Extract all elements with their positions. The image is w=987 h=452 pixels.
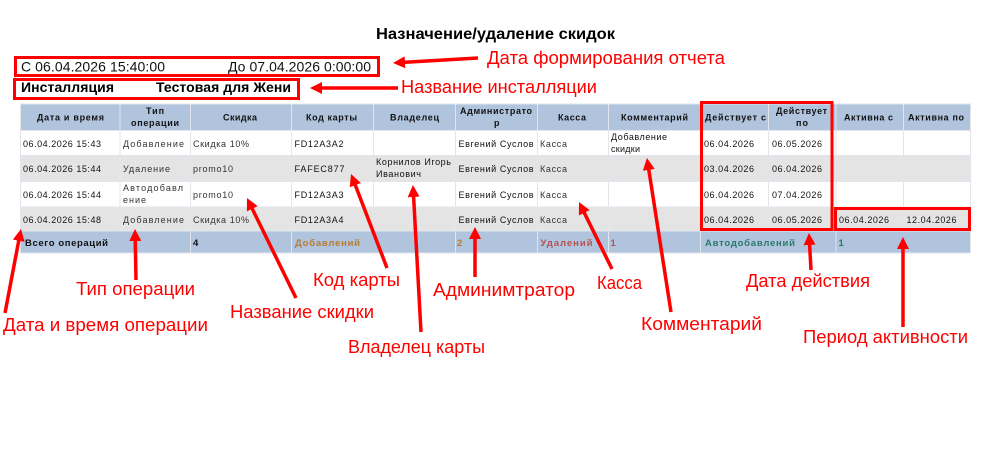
table header [37, 106, 964, 128]
table row 2: Иванович [376, 169, 421, 179]
table totals row: Удалений [540, 238, 593, 249]
label: operation type: Тип операции [76, 279, 195, 299]
arrow: validity dates [810, 243, 811, 270]
report date range: С 06.04.2026 15:40:00 [21, 58, 165, 74]
table header: Комментарий [621, 112, 688, 122]
table totals row: Добавлений [295, 238, 360, 249]
table row 1: Скидка 10% [193, 139, 249, 149]
table row 2: 06.04.2026 15:44 [23, 164, 101, 174]
table row 3: ение [123, 195, 146, 205]
highlight box: validity dates [702, 102, 832, 230]
table header: Действует с [705, 112, 766, 122]
table header: р [494, 118, 500, 128]
arrow: operation type [133, 239, 138, 280]
table header: по [796, 118, 808, 128]
table header: Владелец [390, 112, 439, 122]
table row 1: Добавление [123, 139, 184, 149]
table row 3: Автодобавл [123, 183, 183, 193]
table row 3: Евгений Суслов [458, 190, 534, 200]
table header: Тип [146, 106, 164, 116]
label: discount name: Название скидки [230, 302, 374, 322]
table row 4: Добавление [123, 215, 184, 225]
installation name: Тестовая для Жени [156, 79, 291, 95]
installation name: Инсталляция [21, 79, 114, 95]
table row 4: FD12A3A4 [294, 215, 344, 225]
highlight box: active period [836, 208, 970, 230]
arrow: date and time [5, 239, 19, 313]
table row 2: Корнилов Игорь [376, 157, 451, 167]
table row 2: Касса [540, 164, 567, 174]
table row 2: 03.04.2026 [704, 164, 754, 174]
table backgrounds [20, 104, 971, 253]
table row 4: 06.04.2026 [704, 215, 754, 225]
table row 1: 06.04.2026 [704, 139, 754, 149]
table row 2: promo10 [193, 164, 233, 174]
table row 1: FD12A3A2 [294, 139, 344, 149]
table row 3 [23, 183, 822, 205]
label: installation name: Название инсталляции [401, 77, 597, 97]
table row 2: 06.04.2026 [772, 164, 822, 174]
label: comment: Комментарий [641, 314, 762, 334]
table row 3: promo10 [193, 190, 233, 200]
table row 4: Скидка 10% [193, 215, 249, 225]
arrow: installation [320, 86, 398, 90]
label: card code: Код карты [313, 270, 400, 290]
table row 4 [23, 215, 956, 225]
table totals row: 2 [457, 238, 462, 249]
table row 2: FAFEC877 [294, 164, 344, 174]
table header: Администрато [460, 106, 532, 116]
table [20, 104, 971, 253]
highlight box: report date [16, 58, 378, 76]
highlight box: installation [14, 80, 298, 98]
table row 3: Касса [540, 190, 567, 200]
table row 3: 06.04.2026 15:44 [23, 190, 101, 200]
table row 3: FD12A3A3 [294, 190, 344, 200]
table row 3: 07.04.2026 [772, 190, 822, 200]
table header: Скидка [223, 112, 258, 122]
table row 4: 12.04.2026 [906, 215, 956, 225]
title: Назначение/удаление скидок [376, 26, 615, 43]
table totals row [25, 238, 844, 249]
table row 1: скидки [611, 144, 640, 154]
table row 1: Добавление [611, 132, 667, 142]
table row 1 [23, 132, 822, 154]
arrow: active period [901, 247, 905, 327]
label: card owner: Владелец карты [348, 337, 485, 357]
report date range [21, 58, 371, 74]
table header: Активна по [908, 112, 964, 122]
arrow: card owner [414, 195, 421, 332]
label: validity dates: Дата действия [746, 271, 870, 291]
arrow: comment [648, 168, 671, 312]
arrow: report date [403, 58, 478, 62]
table row 1: Касса [540, 139, 567, 149]
table row 4: Евгений Суслов [458, 215, 534, 225]
label: active period: Период активности [803, 327, 968, 347]
arrow: card code [355, 183, 387, 268]
arrow: administrator [473, 237, 477, 277]
table totals row: 4 [193, 238, 199, 249]
report date range: До 07.04.2026 0:00:00 [228, 58, 371, 74]
table header: Касса [558, 112, 587, 122]
table header: операции [131, 118, 179, 128]
table row 4: 06.04.2026 [839, 215, 889, 225]
table header: Действует [776, 106, 828, 116]
table header: Дата и время [37, 112, 104, 122]
table row 3: 06.04.2026 [704, 190, 754, 200]
table row 1: 06.05.2026 [772, 139, 822, 149]
table totals row: 1 [610, 238, 616, 249]
table row 4: 06.05.2026 [772, 215, 822, 225]
table row 4: 06.04.2026 15:48 [23, 215, 101, 225]
arrow: discount name [251, 207, 296, 298]
label: report date: Дата формирования отчета [487, 48, 726, 68]
table totals row: Автодобавлений [705, 238, 795, 249]
table row 2: Евгений Суслов [458, 164, 534, 174]
table header: Активна с [844, 112, 893, 122]
label: date and time: Дата и время операции [3, 315, 208, 335]
table row 2: Удаление [123, 164, 170, 174]
label: administrator: Админимтратор [433, 280, 575, 300]
table totals row: Всего операций [25, 238, 108, 249]
table row 1: 06.04.2026 15:43 [23, 139, 101, 149]
table row 1: Евгений Суслов [458, 139, 534, 149]
table totals row: 1 [838, 238, 844, 249]
table header: Код карты [306, 112, 357, 122]
table row 2 [23, 157, 822, 179]
table row 4: Касса [540, 215, 567, 225]
label: cash desk: Касса [597, 273, 643, 293]
installation name [21, 79, 291, 95]
arrow: cash desk [583, 211, 612, 269]
